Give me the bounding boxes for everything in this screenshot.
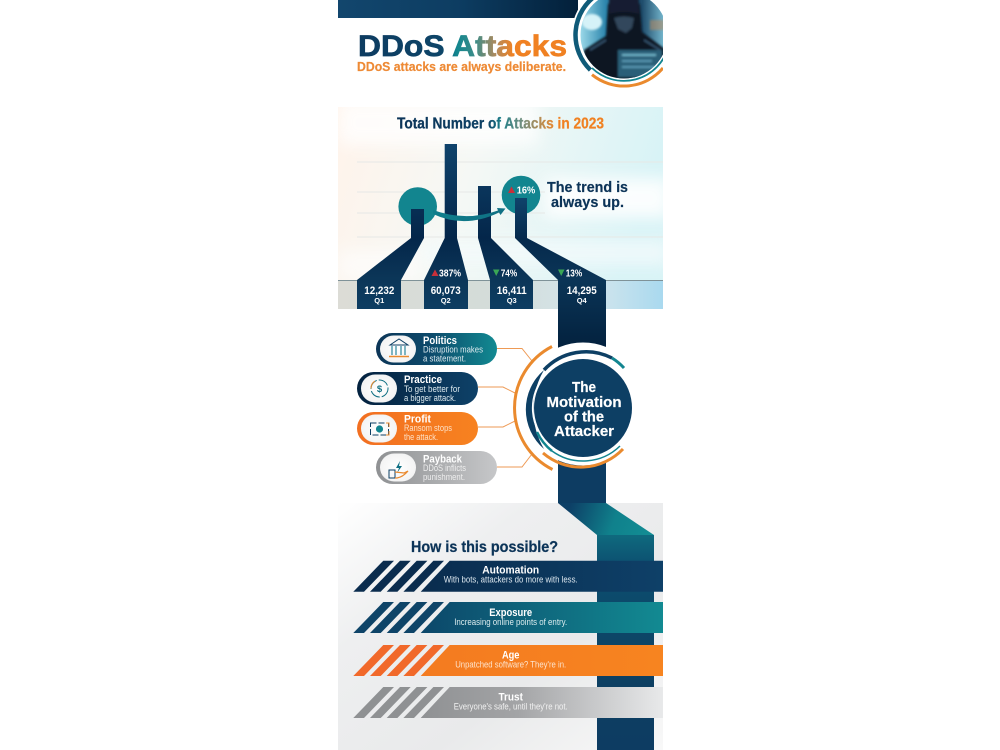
heading: How is this possible? xyxy=(411,539,558,556)
Q3 change xyxy=(493,268,517,279)
panel: how is this possible xyxy=(338,503,663,750)
16 percent label: 16% xyxy=(517,184,536,196)
band: trust: Everyone's safe, until they're not. xyxy=(454,702,568,712)
pill: practice: a bigger attack. xyxy=(404,393,456,403)
pill: practice xyxy=(357,372,478,405)
band: age xyxy=(353,645,663,676)
motivation text: of the xyxy=(564,410,604,426)
Q2 value xyxy=(431,285,461,305)
motivation text: Attacker xyxy=(554,424,614,440)
band: exposure: Increasing online points of entry. xyxy=(454,617,567,627)
band: automation: With bots, attackers do more with less. xyxy=(444,574,578,584)
icon: banknote xyxy=(370,423,389,435)
Q4 change: 13% xyxy=(566,268,582,279)
Q3 change: 74% xyxy=(501,268,517,279)
Q4 value: Q4 xyxy=(577,296,588,305)
chart heading: Total Number of Attacks in 2023 xyxy=(397,116,604,132)
Q4 highlight circle xyxy=(502,176,540,214)
panel: total number of attacks xyxy=(338,100,670,350)
band: trust xyxy=(353,687,663,718)
band: exposure xyxy=(353,602,663,633)
title: DDoS Attacks xyxy=(358,30,567,63)
motivation circle xyxy=(515,342,644,470)
bar Q1 xyxy=(357,209,424,309)
connector lines xyxy=(478,348,532,467)
top bar xyxy=(338,0,578,18)
pill: profit xyxy=(357,412,478,445)
pill: payback: Payback xyxy=(423,454,463,466)
Q1 value xyxy=(364,285,394,305)
Q3 value: 16,411 xyxy=(497,285,527,297)
icon: bank building xyxy=(389,339,409,356)
trend text xyxy=(547,179,628,211)
motivation text: Motivation xyxy=(546,395,622,411)
pill: politics: Politics xyxy=(423,335,457,347)
pill: politics: a statement. xyxy=(423,354,466,364)
band: age: Age xyxy=(502,650,519,662)
Q1 value: Q1 xyxy=(374,296,384,305)
pill: practice: Practice xyxy=(404,374,442,386)
Q4 value: 14,295 xyxy=(567,285,597,297)
folded column xyxy=(558,503,654,750)
Q4 value xyxy=(567,285,597,305)
bar Q3 xyxy=(478,186,533,309)
band: automation: Automation xyxy=(482,564,539,576)
panel: motivation of the attacker xyxy=(357,333,644,484)
column below motivation circle xyxy=(558,450,606,503)
header xyxy=(338,0,676,88)
pill: politics xyxy=(376,333,497,365)
Q4 change xyxy=(558,268,582,279)
band: age: Unpatched software? They're in. xyxy=(455,660,566,670)
pill: payback: punishment. xyxy=(423,472,465,482)
trend text: The trend is xyxy=(547,179,628,196)
bottom strip of chart xyxy=(338,280,663,309)
pill: profit: Ransom stops xyxy=(404,423,453,433)
band: automation xyxy=(353,561,663,592)
icon: dollar target: $ xyxy=(377,384,383,395)
motivation text xyxy=(546,380,622,440)
bar Q2 xyxy=(424,144,468,309)
pill: practice: To get better for xyxy=(404,384,460,394)
pill: politics: Disruption makes xyxy=(423,344,484,354)
Q1 value: 12,232 xyxy=(364,285,394,297)
Q1 highlight circle xyxy=(398,187,437,226)
pill: payback: DDoS inflicts xyxy=(423,463,467,473)
trend arrow xyxy=(433,208,506,221)
icon: hand with bolt xyxy=(389,461,408,478)
Q2 change: 387% xyxy=(439,268,461,279)
band: exposure: Exposure xyxy=(489,607,532,619)
Q3 value xyxy=(497,285,527,305)
Q2 value: 60,073 xyxy=(431,285,461,297)
pill: payback xyxy=(376,451,497,484)
motivation text: The xyxy=(572,380,596,396)
pill: profit: the attack. xyxy=(404,432,438,442)
bar Q4 and column xyxy=(515,198,606,350)
band: trust: Trust xyxy=(498,692,523,704)
trend text: always up. xyxy=(551,194,624,211)
Q3 value: Q3 xyxy=(507,296,517,305)
Q2 value: Q2 xyxy=(441,296,451,305)
16 percent label xyxy=(508,184,536,196)
subtitle: DDoS attacks are always deliberate. xyxy=(357,59,566,74)
header photo: hooded hacker xyxy=(573,0,663,88)
Q2 change xyxy=(432,268,461,279)
pill: profit: Profit xyxy=(404,414,431,426)
